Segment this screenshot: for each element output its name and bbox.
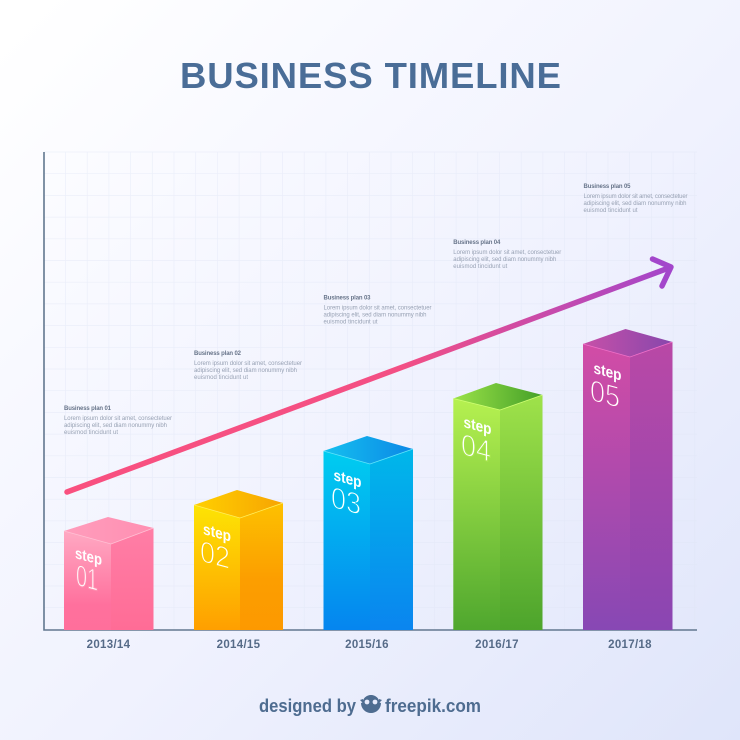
bar: step 05: 05: [590, 373, 620, 415]
text block: business plan 02: Business plan 02: [194, 351, 242, 357]
bar: step 02: 02: [200, 534, 230, 576]
text block: business plan 04: euismod tincidunt ut: [453, 264, 508, 270]
text block: business plan 05: Business plan 05: [584, 184, 631, 190]
text block: business plan 05: adipiscing elit, sed diam nonummy nibh: [584, 201, 686, 207]
bar: step 04: 04: [461, 427, 491, 469]
text block: business plan 02: Lorem ipsum dolor sit amet, consectetuer: [194, 361, 302, 367]
text block: business plan 01: euismod tincidunt ut: [64, 430, 118, 436]
text block: business plan 01: adipiscing elit, sed diam nonummy nibh: [64, 423, 167, 429]
bar: step 01: step: [75, 545, 102, 569]
text block: business plan 03: [324, 296, 432, 326]
text block: business plan 03: Business plan 03: [324, 296, 371, 302]
bar: step 03: 03: [331, 480, 361, 522]
text block: business plan 04: Business plan 04: [453, 240, 501, 246]
year labels: 2017/18: [608, 639, 652, 651]
footer credit text: designed by: [259, 695, 357, 716]
year labels: [87, 639, 652, 651]
text block: business plan 04: Lorem ipsum dolor sit amet, consectetuer: [453, 250, 561, 256]
bar: step 01: [64, 517, 154, 630]
text block: business plan 04: adipiscing elit, sed diam nonummy nibh: [453, 257, 556, 263]
text block: business plan 02: [194, 351, 302, 381]
title: BUSINESS TIMELINE: [180, 55, 561, 96]
text block: business plan 04: [453, 240, 561, 270]
year labels: 2014/15: [217, 639, 261, 651]
bar: step 04: [453, 383, 542, 630]
text block: business plan 05: Lorem ipsum dolor sit amet, consectetuer: [584, 194, 688, 200]
text block: business plan 03: euismod tincidunt ut: [324, 320, 378, 326]
text block: business plan 05: euismod tincidunt ut: [584, 208, 638, 214]
text block: business plan 05: [584, 184, 688, 214]
year labels: 2016/17: [475, 639, 519, 651]
text block: business plan 02: adipiscing elit, sed diam nonummy nibh: [194, 368, 297, 374]
bar: step 01: 01: [76, 558, 98, 598]
footer brand text: freepik.com: [385, 695, 481, 716]
bar: step 03: step: [334, 467, 362, 491]
icon: freepik mascot: [360, 695, 382, 713]
chart axes: [44, 152, 697, 630]
year labels: 2015/16: [345, 639, 389, 651]
text block: business plan 01: Lorem ipsum dolor sit amet, consectetuer: [64, 416, 172, 422]
text block: business plan 01: Business plan 01: [64, 406, 112, 412]
bar: step 05: [583, 329, 672, 630]
text block: business plan 01: [64, 406, 172, 436]
text block: business plan 02: euismod tincidunt ut: [194, 375, 248, 381]
text block: business plan 03: Lorem ipsum dolor sit amet, consectetuer: [324, 306, 432, 312]
bar: step 05: step: [594, 360, 622, 384]
year labels: 2013/14: [87, 639, 131, 651]
rising arrow: [67, 259, 671, 492]
text block: business plan 03: adipiscing elit, sed diam nonummy nibh: [324, 312, 426, 318]
bar: step 02: [194, 490, 283, 630]
bar: step 03: [324, 436, 413, 630]
bar: step 02: step: [203, 521, 231, 545]
bar: step 04: step: [464, 414, 492, 438]
